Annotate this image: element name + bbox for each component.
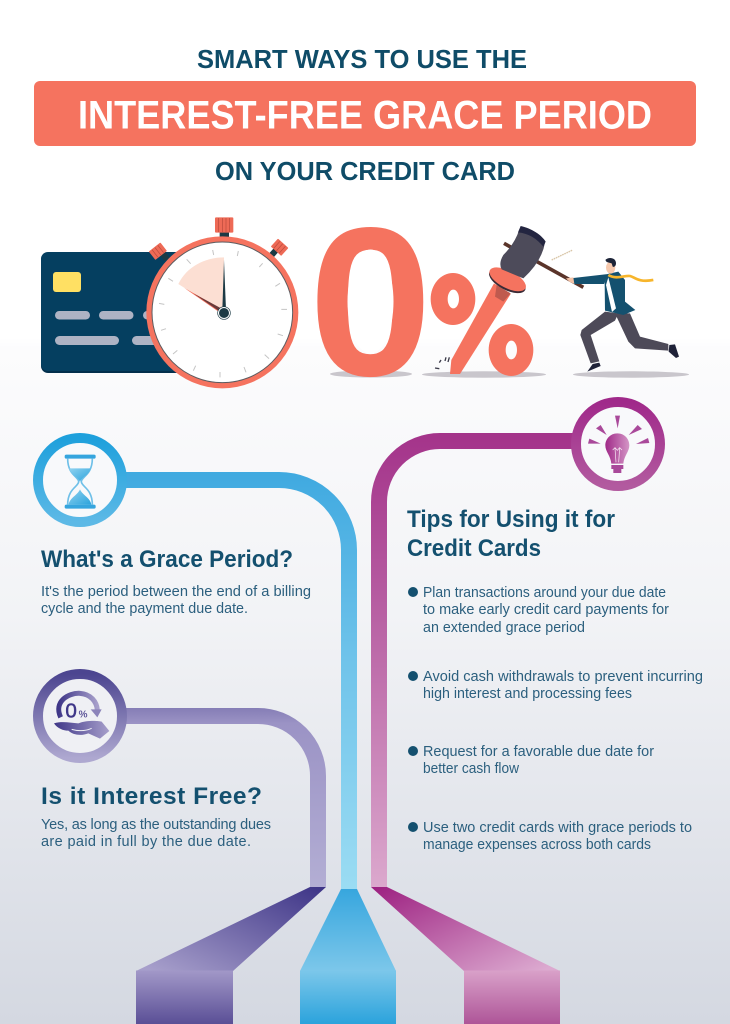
body: Yes, as long as the outstanding dues: [41, 817, 271, 833]
illustration: credit card: [41, 252, 191, 373]
businessman: [566, 258, 679, 372]
illustration: percent sign hit by gavel: [431, 226, 679, 376]
tip 1: [408, 585, 669, 636]
second hand: [184, 288, 223, 315]
tip 2: Avoid cash withdrawals to prevent incurring: [423, 669, 703, 685]
left pusher: [149, 243, 171, 265]
illustration: ground shadows: [330, 370, 689, 378]
icon: zero percent in hand: %: [79, 710, 88, 721]
tip 4: Use two credit cards with grace periods to: [423, 820, 692, 836]
heading: Tips for Using it for: [407, 506, 615, 533]
text block: is it interest free: [41, 783, 271, 850]
title block: [34, 46, 696, 186]
body: cycle and the payment due date.: [41, 601, 248, 617]
percent circles: [431, 273, 533, 376]
elapsed wedge: [178, 257, 224, 313]
coral banner: INTEREST-FREE GRACE PERIOD: [78, 94, 652, 138]
top crown: [215, 217, 233, 237]
body: [41, 584, 311, 617]
tip 3: [408, 744, 654, 777]
heading: Is it Interest Free?: [41, 783, 262, 810]
body: [41, 817, 271, 850]
heading: Credit Cards: [407, 535, 541, 562]
magenta base shape: [371, 887, 560, 971]
right pusher: [267, 239, 288, 260]
icon: hourglass: [38, 438, 122, 522]
tip 4: [408, 820, 692, 853]
tip 2: high interest and processing fees: [423, 686, 632, 702]
connector: magenta pipe: [371, 441, 580, 1024]
tip 2: [408, 669, 703, 702]
body: It's the period between the end of a billing: [41, 584, 311, 600]
purple base shape: [136, 887, 326, 971]
icon: zero percent in hand: 0: [65, 699, 77, 722]
coral banner: [34, 81, 696, 146]
percent slash as nail: [450, 283, 511, 374]
tip 1: an extended grace period: [423, 620, 585, 636]
nail head: [485, 264, 529, 298]
tip 4: manage expenses across both cards: [423, 837, 651, 853]
heading line 3: ON YOUR CREDIT CARD: [215, 158, 515, 186]
tip 1: to make early credit card payments for: [423, 602, 669, 618]
tip 3: better cash flow: [423, 761, 519, 777]
connector: purple pipe: [120, 716, 326, 1024]
impact sparks: [435, 357, 449, 369]
illustration: stopwatch: [146, 217, 298, 388]
tick marks: [159, 250, 287, 377]
icon: zero percent in hand: [38, 674, 122, 758]
heading: What's a Grace Period?: [41, 546, 293, 573]
body: are paid in full by the due date.: [41, 834, 251, 850]
heading: [407, 506, 615, 562]
connector: blue pipe: [120, 480, 396, 1024]
icon: light bulb: [576, 402, 660, 486]
text block: tips: [407, 506, 703, 853]
heading line 1: SMART WAYS TO USE THE: [197, 46, 527, 74]
minute hand: [222, 260, 226, 310]
gavel: [500, 226, 583, 287]
tip 3: Request for a favorable due date for: [423, 744, 654, 760]
tip 1: Plan transactions around your due date: [423, 585, 666, 601]
blue base shape: [300, 889, 396, 971]
big zero: 0: [309, 184, 432, 421]
text block: what's a grace period: [41, 546, 311, 617]
